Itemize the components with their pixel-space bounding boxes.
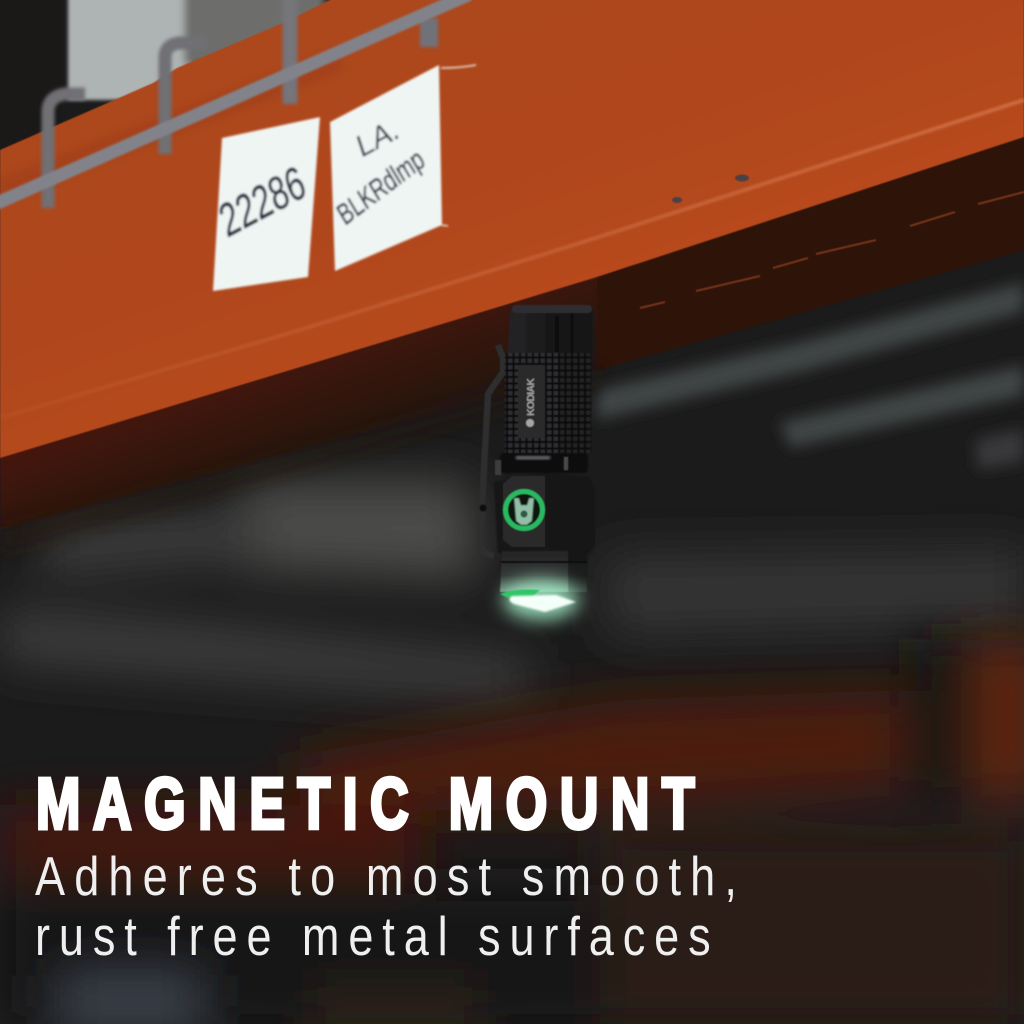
- top-left background behind the beam: [0, 0, 325, 150]
- orange beam underside: [0, 130, 1024, 555]
- note: LA. BLKRdlmp: LA.: [353, 112, 403, 165]
- logo plate: KODIAK: [525, 378, 537, 416]
- flashlight: [480, 305, 595, 592]
- blurred lower orange beam: [0, 640, 1024, 1024]
- note: 22286: [213, 117, 320, 291]
- orange beam face: [0, 0, 1024, 458]
- blurred warehouse background bands: [0, 480, 1024, 700]
- note: 22286: 22286: [213, 155, 312, 247]
- subtitle: Adheres to most smooth,: [35, 845, 737, 907]
- power button: [506, 492, 542, 528]
- light emitter: [509, 595, 576, 612]
- head: [494, 473, 595, 553]
- green rim: [500, 590, 540, 598]
- subtitle: [35, 845, 737, 967]
- pocket clip: [480, 345, 503, 556]
- title: MAGNETIC MOUNT: [36, 765, 695, 844]
- green glow: [503, 580, 579, 620]
- neck ring: [500, 453, 588, 473]
- bezel: [500, 551, 587, 592]
- blurred ceiling lights on right: [597, 282, 1024, 470]
- scratches on beam underside: [640, 192, 1024, 308]
- logo plate: [518, 365, 545, 438]
- note: LA. BLKRdlmp: BLKRdlmp: [332, 143, 430, 232]
- rail bar: [0, 0, 470, 204]
- knurled body: [505, 353, 591, 454]
- wire rack rail: [48, 0, 429, 208]
- beam highlight edge: [0, 100, 1024, 418]
- note: LA. BLKRdlmp: [330, 65, 476, 271]
- tail cap: [508, 305, 594, 353]
- beam surface spots: [672, 174, 749, 203]
- subtitle: rust free metal surfaces: [35, 905, 711, 967]
